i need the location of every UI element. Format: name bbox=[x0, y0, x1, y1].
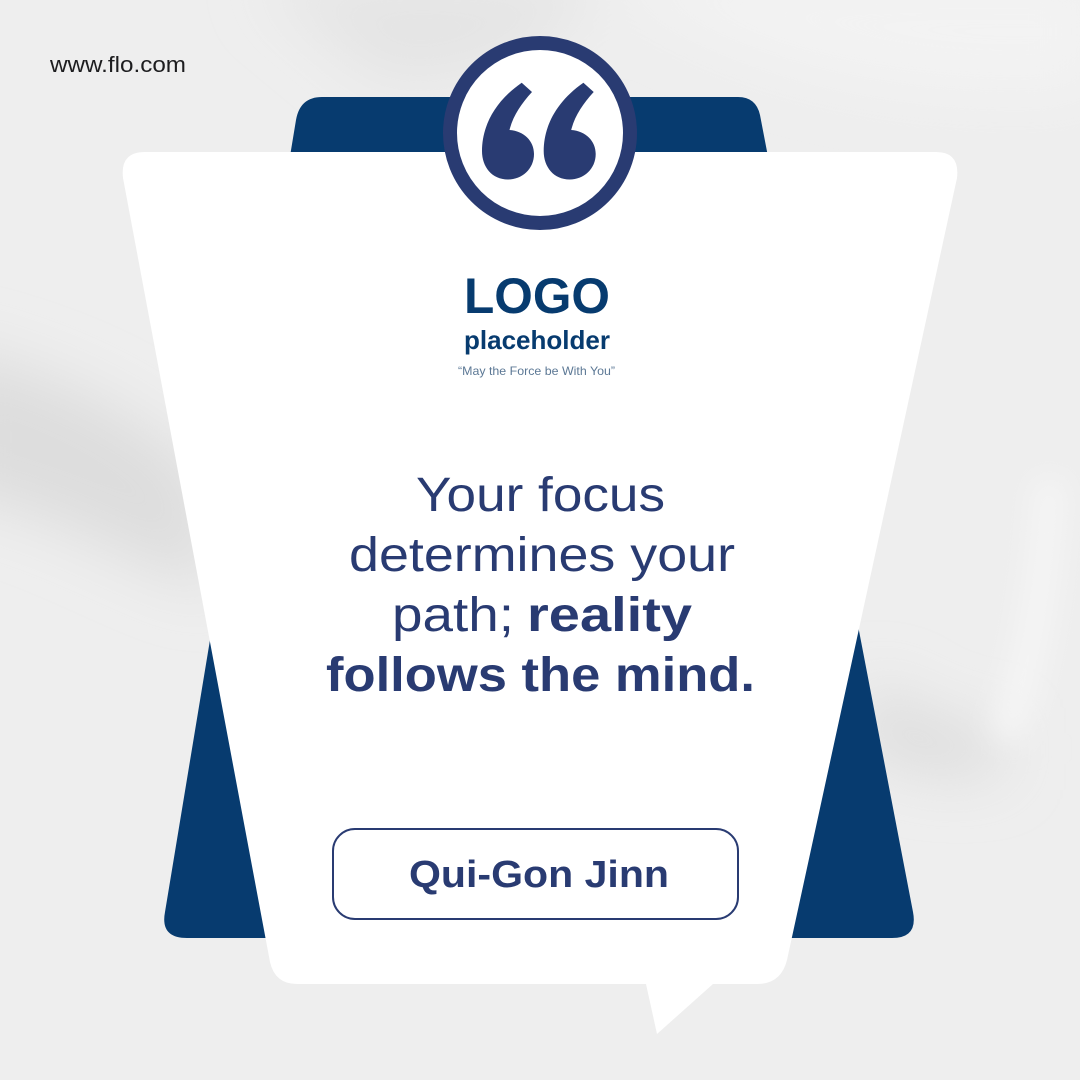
logo: placeholder bbox=[464, 325, 610, 355]
author name button bbox=[333, 829, 738, 919]
logo bbox=[458, 268, 615, 378]
quote text: follows the mind. bbox=[326, 649, 755, 702]
back panel: navy trapezoid bbox=[164, 97, 914, 938]
quote text: path; bbox=[392, 589, 514, 642]
quote text bbox=[326, 469, 755, 702]
logo: LOGO bbox=[464, 268, 610, 324]
website url: www.flo.com bbox=[49, 52, 186, 77]
quote text: reality bbox=[527, 589, 692, 642]
logo: “May the Force be With You” bbox=[458, 364, 615, 378]
author name button: Qui-Gon Jinn bbox=[409, 854, 669, 896]
quote text: determines your bbox=[349, 529, 735, 582]
front panel: white speech bubble bbox=[123, 152, 957, 1034]
icon: quotation marks badge bbox=[450, 43, 630, 223]
quote text: Your focus bbox=[416, 469, 665, 522]
